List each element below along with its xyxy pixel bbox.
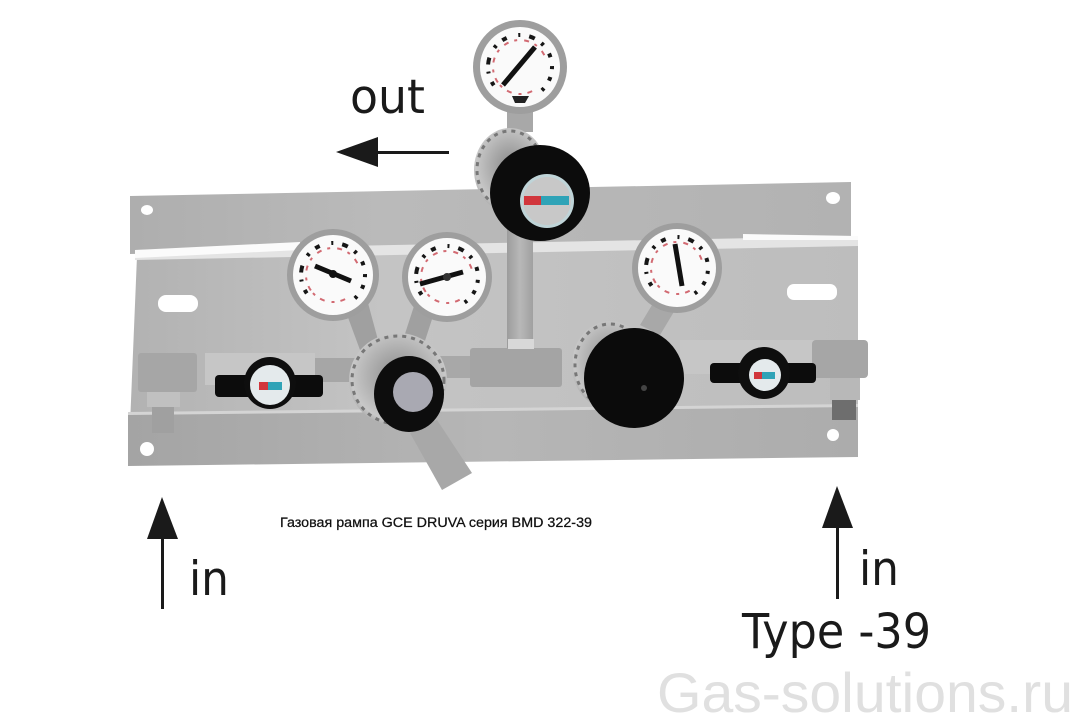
- regulator: top outlet: [474, 104, 590, 241]
- gauge: top: [473, 20, 567, 114]
- watermark: Gas-solutions.ru: [657, 661, 1073, 723]
- gauge: left 2: [402, 232, 492, 322]
- regulator: left, with outlet stem: [346, 303, 472, 490]
- label: right in: in: [859, 542, 899, 597]
- arrow: out: [336, 137, 449, 167]
- ball valve: left: [215, 357, 323, 409]
- caption: Газовая рампа GCE DRUVA серия BMD 322-39: [280, 515, 592, 530]
- panel: mounting plates: [128, 182, 858, 466]
- fitting: right inlet: [812, 340, 868, 420]
- label: type: Type -39: [741, 604, 931, 660]
- ball valve: right: [710, 347, 816, 399]
- fitting: left inlet: [138, 353, 197, 433]
- gauge: right: [632, 223, 722, 313]
- pipe: horizontal line: [205, 339, 815, 387]
- regulator: right: [572, 300, 684, 428]
- arrow: right in: [822, 486, 853, 599]
- pipe: vertical riser: [507, 225, 533, 350]
- label: out: out: [350, 70, 425, 125]
- label: left in: in: [189, 552, 229, 607]
- gauge: left 1: [287, 229, 379, 321]
- arrow: left in: [147, 497, 178, 609]
